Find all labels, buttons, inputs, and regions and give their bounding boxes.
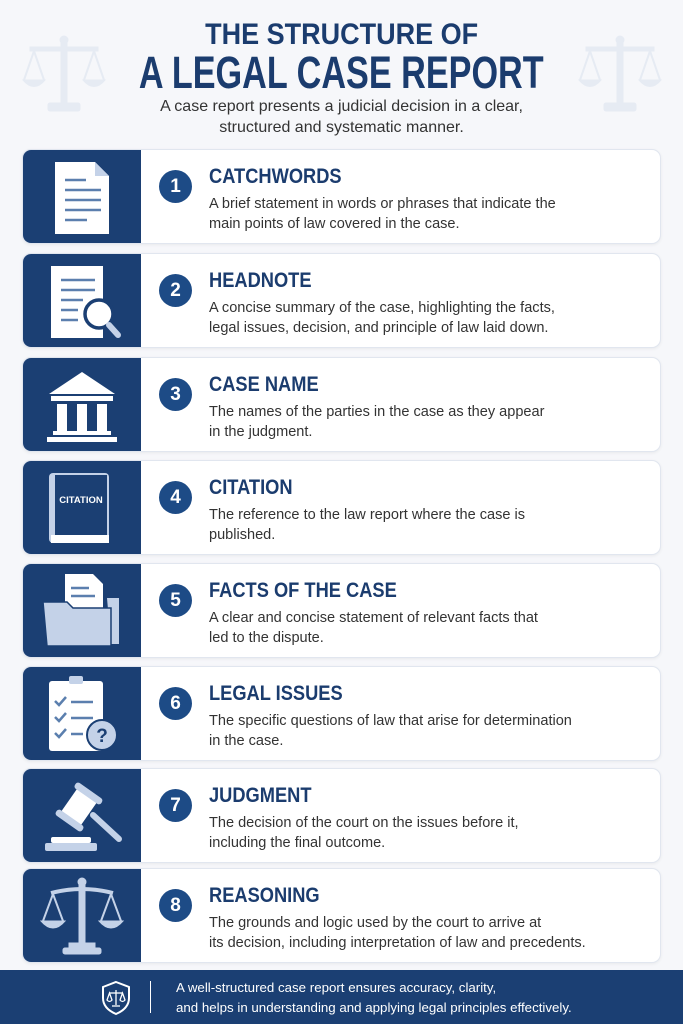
icon: folder xyxy=(23,564,141,659)
number 3: 3 xyxy=(170,384,181,405)
number 4 xyxy=(159,481,192,514)
divider line xyxy=(150,981,151,1013)
text: main points of law covered in the case. xyxy=(209,216,460,232)
text: published. xyxy=(209,527,275,543)
number 8 xyxy=(159,889,192,922)
decorative scales left xyxy=(22,36,106,112)
heading: CASE NAME xyxy=(209,373,319,396)
text: including the final outcome. xyxy=(209,835,385,851)
title line 2: A LEGAL CASE REPORT xyxy=(139,47,544,98)
subtitle: A case report presents a judicial decision in a clear, xyxy=(160,98,523,115)
panel: reasoning xyxy=(22,868,661,963)
icon: citation book: CITATION xyxy=(59,495,103,506)
panel: case name xyxy=(22,357,661,452)
number 5: 5 xyxy=(170,590,181,611)
text xyxy=(209,915,586,951)
heading: CATCHWORDS xyxy=(209,165,342,188)
text: in the judgment. xyxy=(209,424,312,440)
heading: LEGAL ISSUES xyxy=(209,682,343,705)
number 1: 1 xyxy=(170,176,181,197)
text xyxy=(209,713,572,749)
panel: catchwords xyxy=(22,149,661,244)
text: The names of the parties in the case as they appear xyxy=(209,404,544,420)
icon: document with magnifier xyxy=(23,254,141,349)
text: led to the dispute. xyxy=(209,630,324,646)
number 7 xyxy=(159,789,192,822)
text: The decision of the court on the issues before it, xyxy=(209,815,519,831)
text: legal issues, decision, and principle of law laid down. xyxy=(209,320,548,336)
number 3 xyxy=(159,378,192,411)
heading: REASONING xyxy=(209,884,320,907)
icon: checklist with question xyxy=(23,667,141,762)
text: A concise summary of the case, highlighting the facts, xyxy=(209,300,555,316)
text: A clear and concise statement of relevant facts that xyxy=(209,610,538,626)
text xyxy=(209,815,519,851)
number 4: 4 xyxy=(170,487,181,508)
footer text xyxy=(176,980,572,1015)
text xyxy=(209,196,556,232)
text xyxy=(209,300,555,336)
panel: headnote xyxy=(22,253,661,348)
heading: FACTS OF THE CASE xyxy=(209,579,397,602)
panel: facts of the case xyxy=(22,563,661,658)
number 8: 8 xyxy=(170,895,181,916)
text xyxy=(209,404,544,440)
icon: gavel xyxy=(23,769,141,864)
text: The reference to the law report where the case is xyxy=(209,507,525,523)
text xyxy=(209,610,538,646)
heading: HEADNOTE xyxy=(209,269,312,292)
icon: courthouse xyxy=(23,358,141,453)
text: The specific questions of law that arise for determination xyxy=(209,713,572,729)
text: its decision, including interpretation of law and precedents. xyxy=(209,935,586,951)
icon: scales of justice xyxy=(23,869,141,964)
panel: judgment xyxy=(22,768,661,863)
footer text: and helps in understanding and applying legal principles effectively. xyxy=(176,1000,572,1015)
subtitle xyxy=(160,98,523,136)
text: in the case. xyxy=(209,733,283,749)
panel: legal issues xyxy=(22,666,661,761)
heading: JUDGMENT xyxy=(209,784,312,807)
text: The grounds and logic used by the court to arrive at xyxy=(209,915,541,931)
number 5 xyxy=(159,584,192,617)
title: THE STRUCTURE OF xyxy=(205,18,478,51)
panel: citation xyxy=(22,460,661,555)
footer xyxy=(0,970,683,1024)
icon: document xyxy=(23,150,141,245)
subtitle: structured and systematic manner. xyxy=(219,119,464,136)
text xyxy=(209,507,525,543)
icon: citation book xyxy=(23,461,141,556)
text: A brief statement in words or phrases that indicate the xyxy=(209,196,556,212)
number 2: 2 xyxy=(170,280,181,301)
number 7: 7 xyxy=(170,795,181,816)
icon: shield xyxy=(102,980,130,1016)
footer text: A well-structured case report ensures accuracy, clarity, xyxy=(176,980,496,995)
decorative scales right xyxy=(578,36,662,112)
number 6: 6 xyxy=(170,693,181,714)
icon: checklist with question: ? xyxy=(96,726,108,747)
number 1 xyxy=(159,170,192,203)
number 2 xyxy=(159,274,192,307)
number 6 xyxy=(159,687,192,720)
heading: CITATION xyxy=(209,476,293,499)
